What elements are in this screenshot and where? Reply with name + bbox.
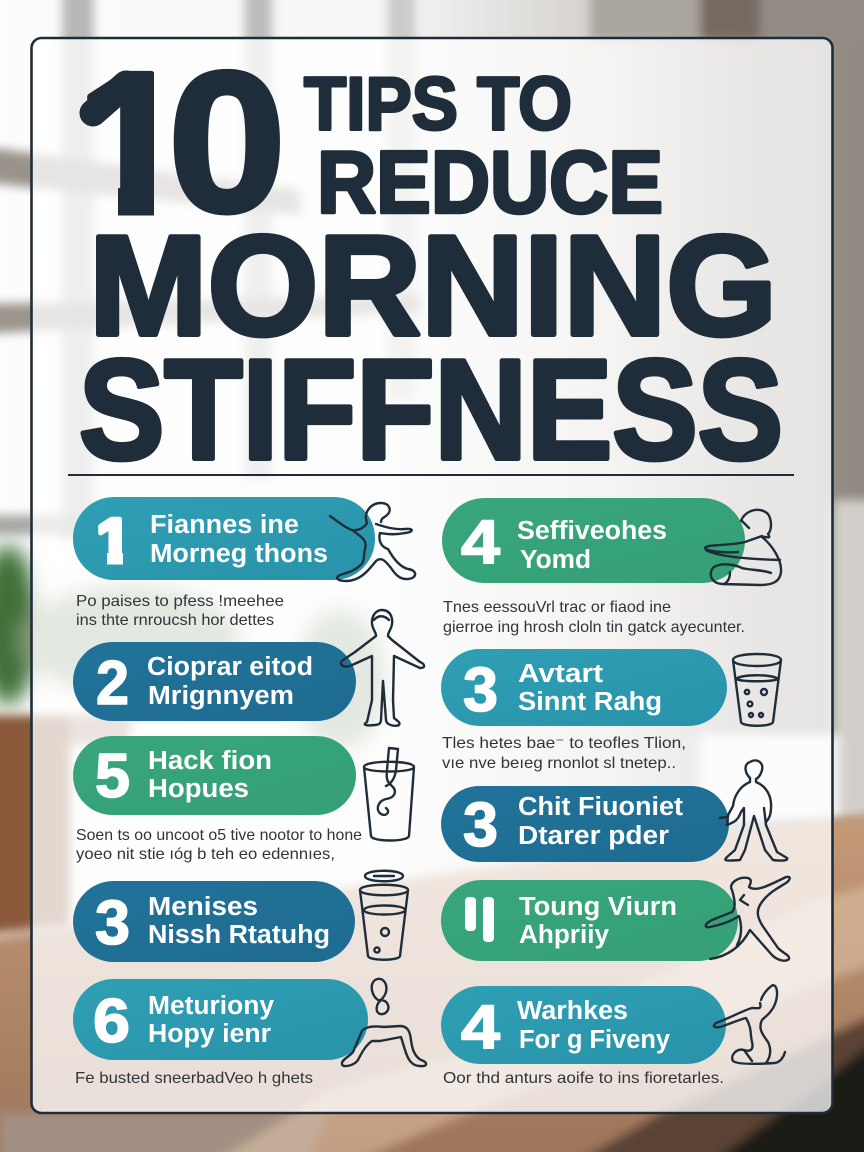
description: Oor thd anturs aoife to ins fioretarles. <box>443 1070 724 1087</box>
pill <box>441 786 729 862</box>
icon: reaching figure <box>714 985 785 1064</box>
heading: Warhkes <box>517 997 628 1025</box>
heading: Yomd <box>520 546 591 574</box>
tip: left 3 <box>73 736 414 863</box>
title number: 10: 1 <box>77 32 188 255</box>
heading: Morneg thons <box>150 540 328 568</box>
icon: seated stretch figure <box>705 510 781 585</box>
number: 6 <box>93 987 130 1056</box>
description: Tnes eessouVrl trac or fiaod ine <box>443 599 671 616</box>
pill <box>442 498 745 583</box>
pill <box>73 736 356 815</box>
tip: right 4 <box>441 877 790 961</box>
title line: MORNING: MORNING <box>89 206 777 366</box>
heading: Seffiveohes <box>517 517 667 545</box>
heading: Hopy ienr <box>148 1020 271 1048</box>
pill <box>441 880 738 961</box>
description: Tles hetes bae⁻ to teofles Tlion, <box>442 735 686 752</box>
description: ins thte rnroucsh hor dettes <box>76 612 274 629</box>
heading: Ahpriiy <box>519 921 610 949</box>
title line: STIFFNESS: STIFFNESS <box>79 330 783 490</box>
icon: dancing figure <box>706 877 790 961</box>
heading: Cioprar eitod <box>147 653 313 681</box>
heading: Hack fion <box>148 747 272 775</box>
tip: right 1 <box>442 498 781 636</box>
description: vıe nve beıeg rnonlot sl tnetep.. <box>442 755 676 772</box>
number: 4 <box>461 508 501 577</box>
pill <box>441 986 726 1064</box>
heading: Toung Viurn <box>519 893 677 921</box>
tip: left 2 <box>73 610 424 726</box>
pill <box>73 642 356 721</box>
number: 4 <box>461 993 501 1062</box>
icon: bridge pose figure <box>342 979 426 1066</box>
description: Soen ts oo uncoot o5 tive nootor to hone <box>76 827 362 844</box>
pill <box>73 979 368 1060</box>
heading: Sinnt Rahg <box>518 688 662 716</box>
number: 5 <box>95 742 130 811</box>
icon: stretching figure <box>330 503 415 581</box>
icon: standing figure <box>720 760 787 861</box>
number: 3 <box>95 889 130 958</box>
icon: glass with straw <box>364 748 414 840</box>
heading: Dtarer pder <box>518 822 669 850</box>
divider rule under title <box>68 474 794 476</box>
title line: REDUCE: REDUCE <box>317 132 663 232</box>
title <box>80 68 780 462</box>
heading: Menises <box>148 893 258 921</box>
heading: Nissh Rtatuhg <box>148 921 330 949</box>
heading: Meturiony <box>148 992 275 1020</box>
number: stylised bars <box>465 897 494 942</box>
heading: Mrignnyem <box>148 682 294 710</box>
icon: glass of water with lid <box>360 871 408 960</box>
heading: Avtart <box>518 660 604 688</box>
heading: Hopues <box>148 775 249 803</box>
pill <box>73 881 355 962</box>
number: 3 <box>463 656 498 725</box>
description: gierroe ing hrosh cloln tin gatck ayecunter. <box>443 619 745 636</box>
tip: left 4 <box>73 871 408 962</box>
pill <box>441 649 727 726</box>
description: Po paises to pfess !meehee <box>76 593 284 610</box>
number: 3 <box>463 791 498 860</box>
heading: Fiannes ine <box>150 511 299 539</box>
heading: For g Fiveny <box>519 1026 671 1054</box>
title line: TIPS TO: TIPS TO <box>304 62 572 146</box>
title number: 10 <box>80 68 280 216</box>
tip: right 3 <box>441 760 787 862</box>
icon: standing figure with arms out <box>341 610 424 726</box>
heading: Chit Fiuoniet <box>518 793 684 821</box>
description: yoeo nit stie ıóg b teh eo edennıes, <box>76 846 335 863</box>
tip: left 5 <box>73 979 426 1087</box>
icon: glass of water with bubbles <box>733 654 781 726</box>
tip: right 5 <box>441 985 785 1087</box>
description: Fe busted sneerbadVeo h ghets <box>75 1070 313 1087</box>
number: 1 <box>96 507 131 576</box>
pill <box>73 497 375 580</box>
tip: left 1 <box>73 497 415 629</box>
title number: 10: 0 <box>168 31 286 254</box>
tip: right 2 <box>441 649 781 772</box>
number: 2 <box>96 649 129 718</box>
